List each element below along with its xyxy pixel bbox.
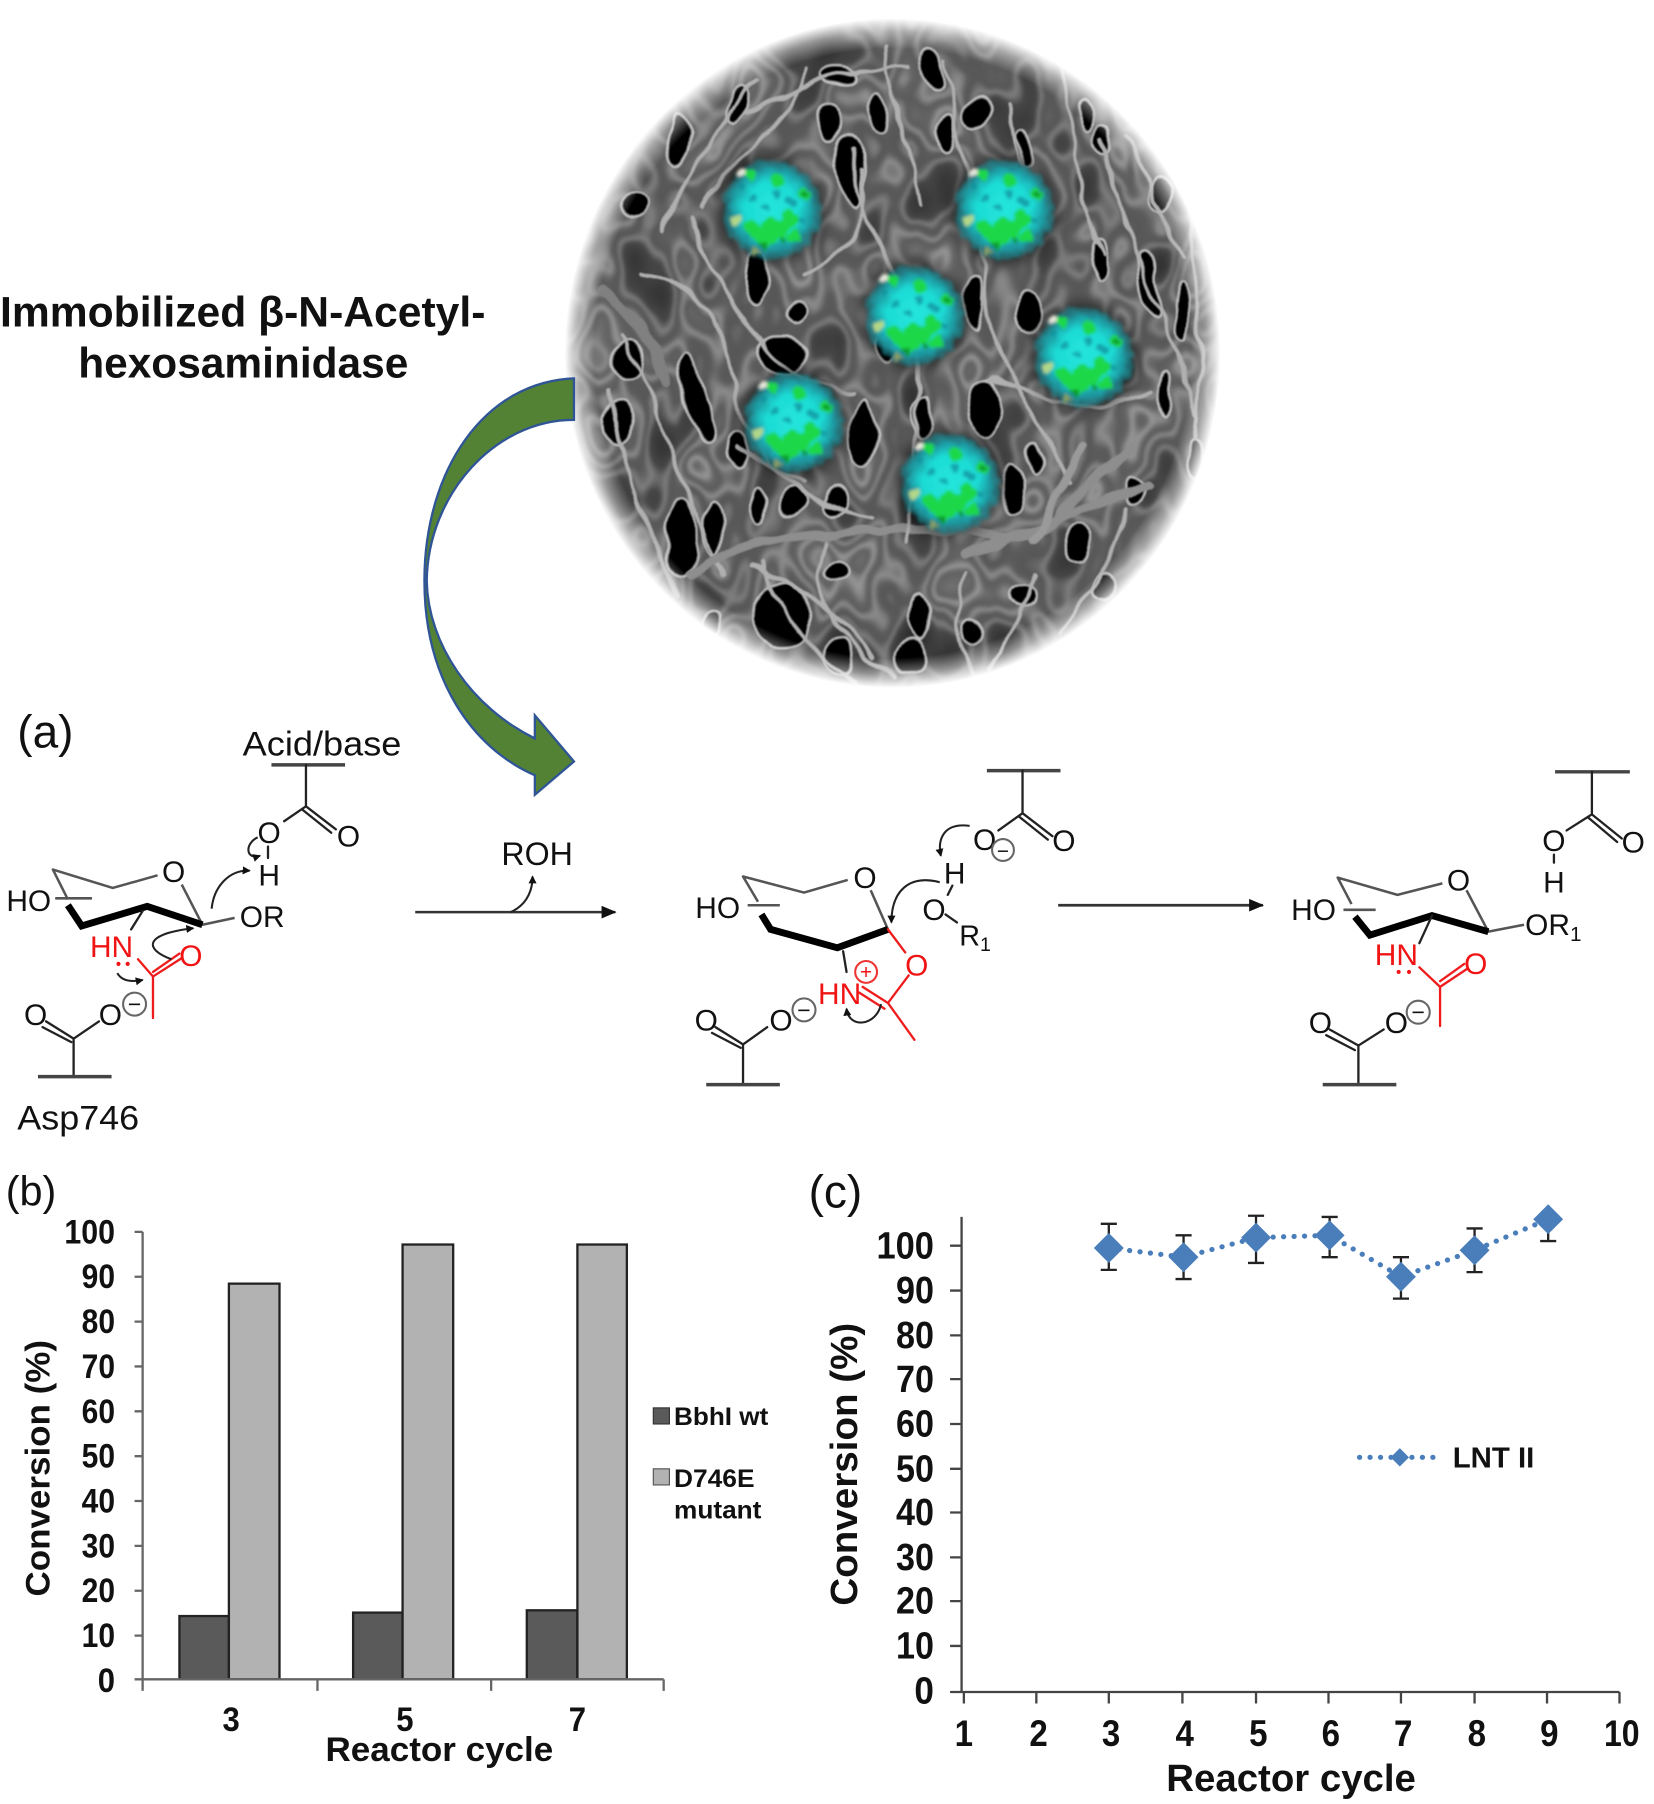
molecule: substrate with acid/base and Asp746: O — [99, 999, 122, 1032]
panel label c: (c) — [809, 1166, 862, 1218]
enzyme 4 — [1029, 303, 1138, 411]
y axis tick labels: 70 — [82, 1348, 115, 1386]
panel b: bar chart — [6, 1168, 769, 1769]
micrograph circle with immobilized enzymes — [566, 20, 1219, 686]
molecule: oxazolinium intermediate: + — [860, 961, 872, 984]
molecule: oxazolinium intermediate: O — [853, 862, 877, 895]
molecule: substrate with acid/base and Asp746: OR — [240, 901, 285, 934]
y axis tick labels: 70 — [896, 1359, 934, 1401]
molecule: oxazolinium intermediate: O — [973, 824, 996, 857]
axes — [135, 1232, 664, 1691]
molecule: substrate with acid/base and Asp746: HO — [6, 885, 51, 918]
x axis title: Reactor cycle — [1166, 1758, 1416, 1800]
data markers — [1094, 1204, 1563, 1292]
y axis tick labels — [876, 1225, 934, 1712]
bars — [179, 1245, 627, 1679]
x axis tick labels: 5 — [1249, 1713, 1268, 1754]
legend — [653, 1403, 769, 1524]
y axis tick labels: 100 — [64, 1213, 115, 1251]
panel label a: (a) — [17, 706, 73, 758]
x axis tick labels: 10 — [1604, 1713, 1640, 1754]
y axis tick labels: 20 — [896, 1581, 934, 1623]
molecule: oxazolinium intermediate: O — [922, 894, 946, 927]
molecule: product — [1291, 772, 1645, 1085]
molecule: oxazolinium intermediate: H — [944, 857, 965, 890]
molecule: product: O — [1309, 1007, 1332, 1040]
y axis tick labels: 30 — [82, 1527, 115, 1565]
y axis title: Conversion (%) — [19, 1340, 57, 1597]
x axis tick labels: 1 — [955, 1713, 973, 1754]
panel label b: (b) — [6, 1168, 56, 1214]
x axis tick labels: 3 — [1102, 1713, 1120, 1754]
molecule: product: OR — [1525, 909, 1570, 942]
reaction arrow 2 — [1058, 904, 1263, 906]
molecule: product: O — [1622, 826, 1645, 859]
y axis tick labels: 50 — [896, 1448, 934, 1490]
legend: BbhI wt — [674, 1403, 769, 1431]
y axis tick labels: 60 — [896, 1404, 934, 1446]
x axis tick labels: 7 — [1394, 1713, 1412, 1754]
molecule: product: 1 — [1570, 923, 1582, 946]
molecule: substrate with acid/base and Asp746: Asp746 — [17, 1100, 139, 1138]
molecule: oxazolinium intermediate: − — [797, 997, 811, 1023]
x axis tick labels: 7 — [569, 1701, 586, 1739]
title: Immobilized β-N-Acetyl-hexosaminidase: Immobilized β-N-Acetyl- — [0, 289, 485, 337]
molecule: oxazolinium intermediate: 1 — [980, 934, 991, 956]
molecule: oxazolinium intermediate: O — [905, 949, 928, 982]
y axis tick labels: 90 — [82, 1258, 115, 1296]
molecule: substrate with acid/base and Asp746 — [6, 726, 401, 1138]
y axis tick labels: 80 — [82, 1303, 115, 1341]
molecule: product: H — [1543, 867, 1565, 900]
reaction arrow with ROH — [415, 836, 615, 912]
y axis tick labels: 80 — [896, 1315, 934, 1357]
molecule: substrate with acid/base and Asp746: HN — [90, 931, 133, 964]
y axis tick labels: 10 — [82, 1617, 115, 1655]
y axis tick labels: 100 — [876, 1225, 934, 1267]
y axis tick labels — [64, 1213, 115, 1700]
molecule: oxazolinium intermediate: O — [769, 1005, 793, 1038]
axes — [950, 1217, 1619, 1703]
molecule: oxazolinium intermediate: O — [1052, 825, 1076, 858]
molecule: substrate with acid/base and Asp746: O — [179, 940, 203, 973]
data line: LNT II — [1109, 1219, 1548, 1277]
molecule: substrate with acid/base and Asp746: O — [258, 817, 281, 850]
molecule: product: − — [1411, 999, 1425, 1025]
legend: mutant — [674, 1496, 762, 1524]
y axis tick labels: 60 — [82, 1393, 115, 1431]
enzyme 3 — [860, 261, 968, 369]
panel a: reaction mechanism — [6, 706, 1645, 1138]
molecule: substrate with acid/base and Asp746: O — [24, 999, 47, 1032]
y axis tick labels: 0 — [98, 1662, 115, 1700]
x axis tick labels: 4 — [1176, 1713, 1194, 1754]
molecule: product: O — [1464, 948, 1487, 981]
panel c: line chart — [809, 1166, 1640, 1800]
molecule: oxazolinium intermediate: HO — [695, 892, 740, 925]
y axis tick labels: 90 — [896, 1270, 934, 1312]
molecule: product: O — [1385, 1007, 1408, 1040]
y axis tick labels: 40 — [82, 1483, 115, 1521]
molecule: substrate with acid/base and Asp746: O — [162, 856, 185, 889]
y axis tick labels: 10 — [896, 1626, 934, 1668]
legend: LNT II: LNT II — [1453, 1443, 1534, 1475]
error bars — [1101, 1208, 1556, 1299]
x axis tick labels — [955, 1713, 1640, 1754]
molecule: product: HN — [1375, 939, 1418, 972]
molecule: product: HO — [1291, 894, 1336, 927]
y axis tick labels: 40 — [896, 1492, 934, 1534]
x axis tick labels: 9 — [1540, 1713, 1559, 1754]
y axis tick labels: 0 — [914, 1670, 934, 1712]
y axis title: Conversion (%) — [824, 1323, 866, 1606]
molecule: substrate with acid/base and Asp746: − — [128, 991, 141, 1017]
x axis tick labels — [223, 1701, 586, 1739]
molecule: product: O — [1447, 864, 1470, 897]
x axis title: Reactor cycle — [326, 1731, 553, 1769]
molecule: substrate with acid/base and Asp746: H — [258, 860, 280, 893]
x axis tick labels: 6 — [1322, 1713, 1340, 1754]
molecule: product: O — [1542, 825, 1566, 858]
legend: D746E — [674, 1465, 755, 1493]
y axis tick labels: 20 — [82, 1572, 115, 1610]
molecule: substrate with acid/base and Asp746: O — [337, 821, 360, 854]
x axis tick labels: 5 — [396, 1701, 413, 1739]
molecule: oxazolinium intermediate — [695, 771, 1076, 1085]
molecule: oxazolinium intermediate: HN — [818, 978, 861, 1011]
molecule: oxazolinium intermediate: O — [695, 1005, 718, 1038]
x axis tick labels: 2 — [1029, 1713, 1048, 1754]
molecule: oxazolinium intermediate: − — [997, 840, 1009, 863]
molecule: substrate with acid/base and Asp746: Acid/base — [243, 726, 401, 764]
curved green arrow — [424, 378, 574, 795]
title: Immobilized β-N-Acetyl-hexosaminidase: hexosaminidase — [78, 339, 408, 387]
x axis tick labels: 8 — [1468, 1713, 1486, 1754]
enzyme 6 — [896, 429, 1004, 537]
enzyme 5 — [740, 368, 848, 476]
y axis tick labels: 30 — [896, 1537, 934, 1579]
y axis tick labels: 50 — [82, 1438, 115, 1476]
enzyme 2 — [950, 155, 1058, 263]
x axis tick labels: 3 — [223, 1701, 240, 1739]
molecule: oxazolinium intermediate: R — [959, 920, 980, 952]
reaction arrow with ROH: ROH — [501, 836, 573, 872]
legend: LNT II — [1360, 1443, 1534, 1475]
title: Immobilized β-N-Acetyl-hexosaminidase — [0, 289, 485, 387]
enzyme 1 — [718, 155, 826, 263]
